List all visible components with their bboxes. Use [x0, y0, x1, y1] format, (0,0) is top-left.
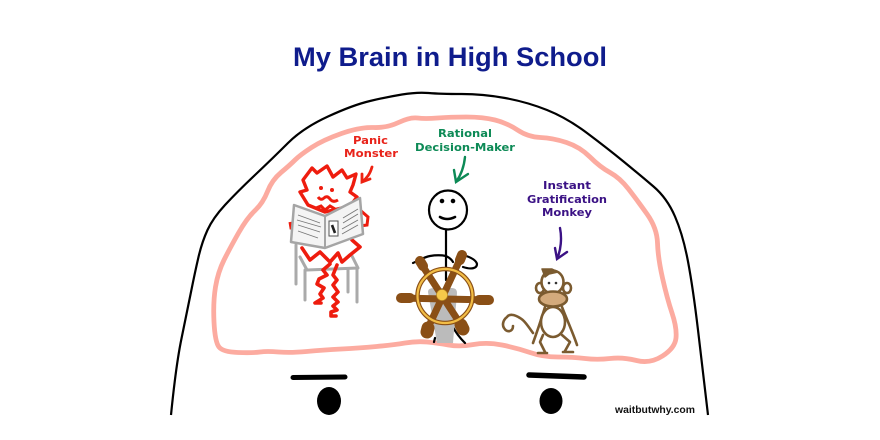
- newspaper: [291, 198, 363, 248]
- panic monster label: [344, 134, 399, 160]
- monster face: [316, 186, 338, 210]
- watermark: waitbutwhy.com: [614, 404, 695, 416]
- stick figure: [413, 190, 477, 343]
- monkey head: [542, 270, 564, 294]
- rational decision-maker label: Decision-Maker: [415, 141, 516, 154]
- monster body and legs: [302, 240, 360, 316]
- monkey arrow: [555, 228, 567, 259]
- monkey muzzle: [539, 292, 567, 306]
- monkey label: Monkey: [542, 207, 592, 219]
- right eye: [540, 388, 562, 414]
- monkey arms and legs: [533, 307, 577, 353]
- monkey label: Instant: [543, 180, 591, 192]
- panic monster arrow: [362, 167, 372, 182]
- monkey: [503, 269, 577, 353]
- rational decision-maker label: Rational: [438, 127, 492, 140]
- monkey tail: [503, 315, 533, 333]
- wheel hub: [436, 290, 448, 300]
- chair: [296, 245, 358, 302]
- figure head: [429, 190, 467, 230]
- right eyebrow: [529, 375, 584, 377]
- panic monster label: Monster: [344, 147, 399, 160]
- rational decision-maker arrow: [454, 157, 468, 182]
- head outline: [171, 93, 708, 415]
- monkey ears: [536, 283, 544, 293]
- pedestal: [428, 288, 457, 343]
- left eyebrow: [293, 374, 345, 380]
- monkey label: Gratification: [527, 194, 607, 206]
- monster hands: [290, 210, 368, 228]
- monkey label: [527, 180, 607, 219]
- monster head: [300, 166, 357, 212]
- rational decision-maker label: [415, 127, 516, 154]
- ship wheel: [400, 255, 490, 343]
- panic monster label: Panic: [353, 134, 388, 147]
- monkey body: [541, 307, 565, 337]
- left eye: [317, 387, 341, 415]
- brain outline: [214, 117, 676, 362]
- panic monster: [290, 166, 368, 316]
- title: My Brain in High School: [293, 42, 607, 72]
- wheel rim: [418, 269, 472, 323]
